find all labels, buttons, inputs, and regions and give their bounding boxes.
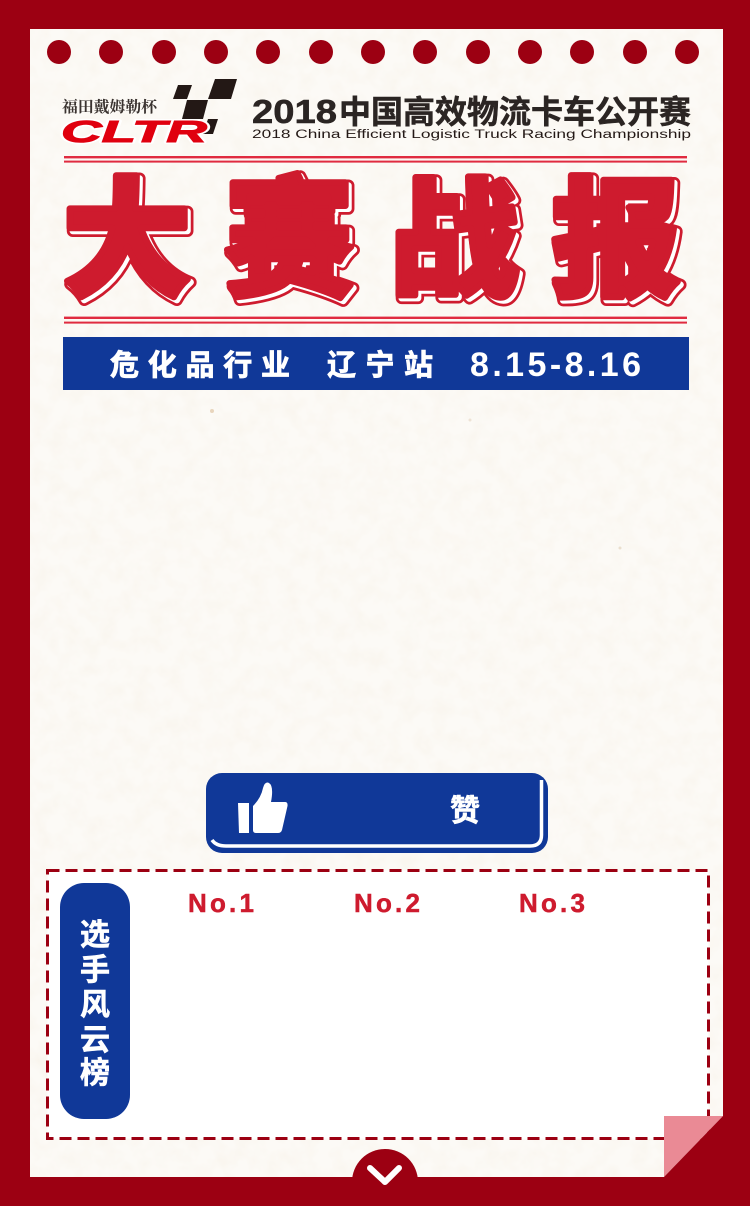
title highlight layer bbox=[66, 173, 683, 316]
logo wordmark: CLTR bbox=[61, 114, 208, 149]
title outline layer bbox=[66, 173, 683, 316]
rank 2 heading: No.2 bbox=[354, 888, 423, 918]
title face layer: 大 bbox=[63, 170, 191, 313]
title highlight layer: 报 bbox=[555, 173, 683, 316]
banner dates: 8.15-8.16 bbox=[470, 346, 641, 384]
event title: 2018 bbox=[252, 93, 337, 130]
rank 1 heading: No.1 bbox=[188, 888, 257, 918]
title outline layer: 赛 bbox=[228, 173, 356, 316]
title outline layer: 战 bbox=[393, 173, 521, 316]
title highlight layer: 战 bbox=[393, 173, 521, 316]
icon: thumbs up bbox=[238, 783, 288, 833]
title face layer bbox=[63, 170, 680, 313]
title highlight layer: 赛 bbox=[228, 173, 356, 316]
panel: player leaderboard bbox=[48, 870, 708, 1138]
logo checker flag bbox=[173, 79, 237, 134]
title highlight layer: 大 bbox=[66, 173, 194, 316]
top double rule bbox=[64, 156, 687, 163]
title face layer: 报 bbox=[552, 170, 680, 313]
binder dots bbox=[47, 40, 699, 64]
leaderboard side tab: 云 bbox=[80, 1024, 110, 1057]
next page arrow bbox=[352, 1149, 418, 1206]
banner industry text: 危化品行业 bbox=[110, 349, 290, 382]
banner station text: 辽宁站 bbox=[327, 349, 433, 382]
like button bbox=[206, 773, 548, 853]
event subtitle: 2018 China Efficient Logistic Truck Racing Championship bbox=[252, 129, 691, 141]
title outline layer: 大 bbox=[66, 173, 194, 316]
leaderboard side tab: 风 bbox=[80, 989, 110, 1022]
logo: CLTR bbox=[61, 79, 237, 149]
leaderboard side tab: 榜 bbox=[80, 1057, 110, 1090]
logo wordmark bbox=[61, 114, 208, 149]
title face layer: 赛 bbox=[225, 170, 353, 313]
page curl corner bbox=[664, 1116, 723, 1177]
title face layer: 战 bbox=[390, 170, 518, 313]
banner: race info bbox=[63, 337, 689, 390]
rank 3 heading: No.3 bbox=[519, 888, 588, 918]
leaderboard side tab: 选 bbox=[80, 919, 110, 952]
main title bbox=[63, 170, 683, 316]
leaderboard side tab: 手 bbox=[80, 954, 110, 987]
like label: 赞 bbox=[450, 795, 480, 828]
bottom double rule bbox=[64, 317, 687, 324]
logo wordmark: CLTR bbox=[61, 114, 208, 149]
leaderboard side tab bbox=[60, 883, 130, 1119]
title outline layer: 报 bbox=[555, 173, 683, 316]
logo sponsor name: 福田戴姆勒杯 bbox=[62, 97, 159, 116]
event title: 中国高效物流卡车公开赛 bbox=[339, 94, 691, 130]
